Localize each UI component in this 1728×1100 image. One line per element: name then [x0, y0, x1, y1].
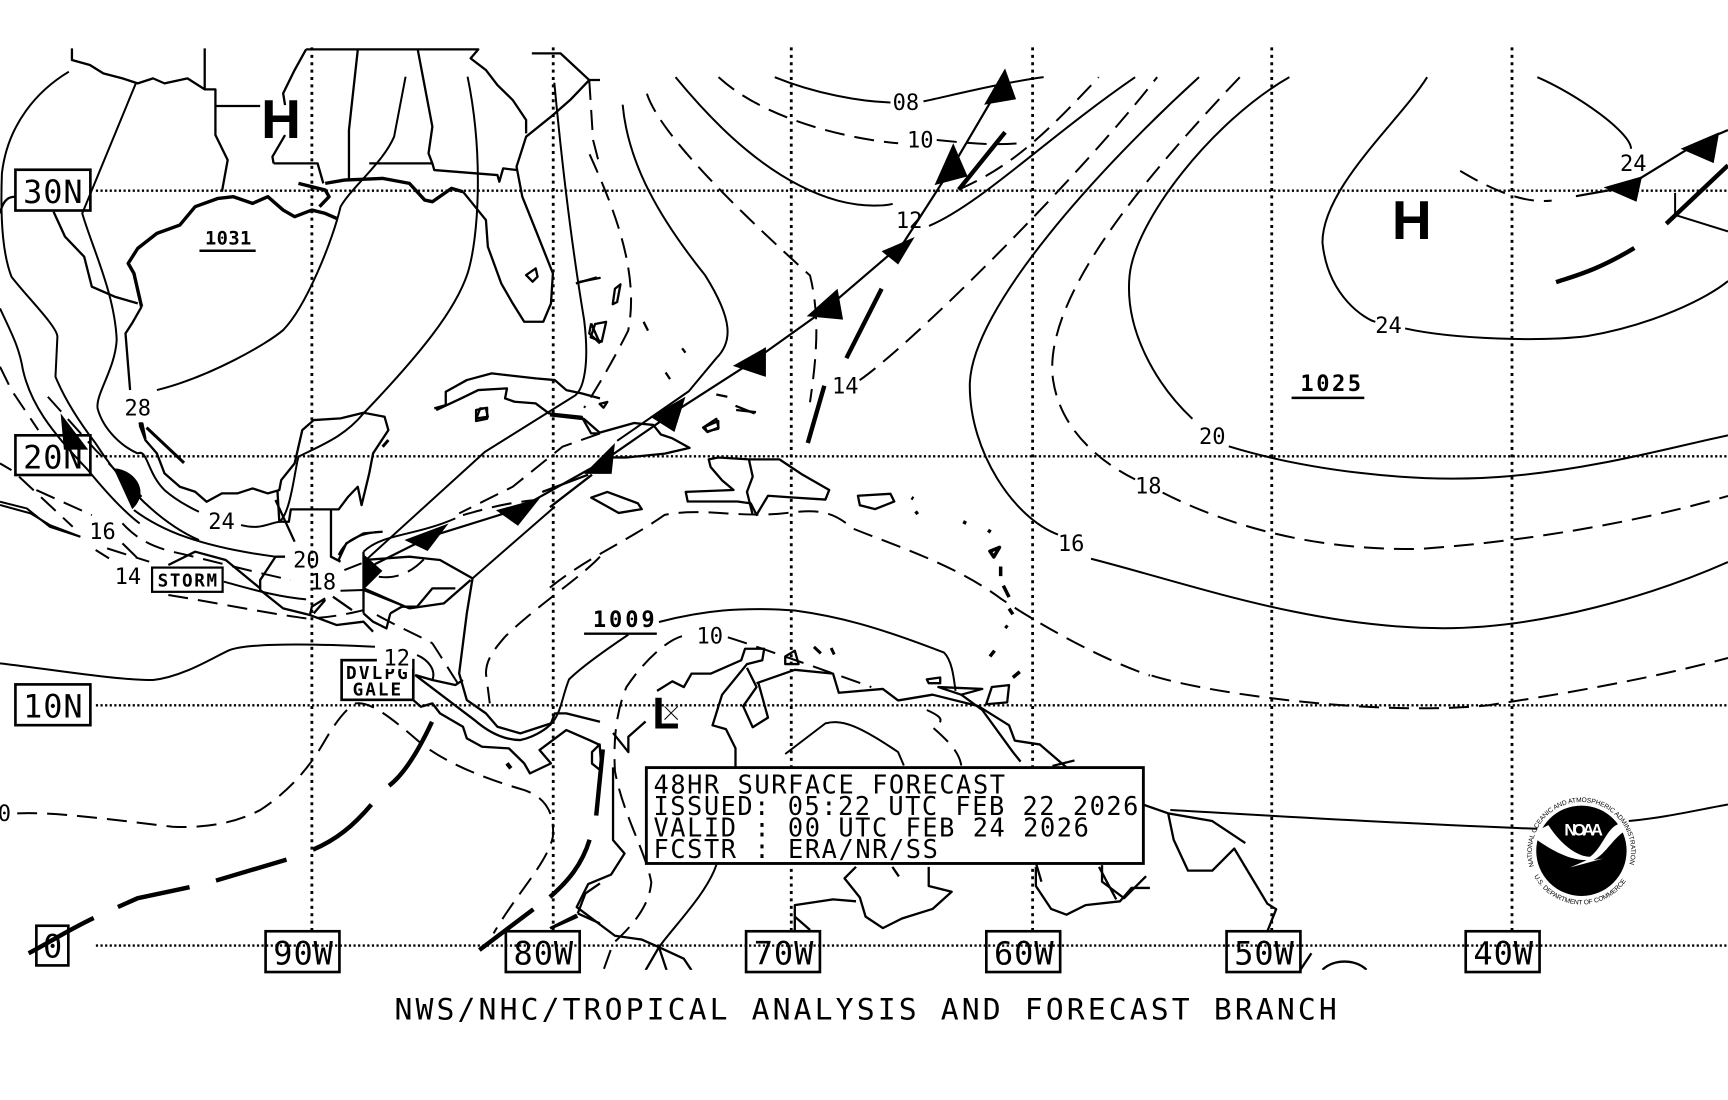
storm warning label [152, 568, 223, 592]
NOAA logo: NATIONAL OCEANIC AND ATMOSPHERIC ADMINISTRATION [1527, 797, 1636, 867]
isobar value labels: 10 [696, 625, 723, 650]
latitude label: 30N: 30N [23, 173, 83, 211]
isobars: Caribbean [550, 609, 956, 947]
isobars: dashed Central America [17, 500, 600, 933]
isobar value labels: 16 [89, 520, 116, 545]
isobars: dashed Caribbean [550, 511, 1150, 970]
isobar value labels: 18 [1135, 475, 1162, 500]
isobars: Atlantic dashed [584, 77, 1728, 708]
low pressure marker: L [652, 689, 679, 738]
coastlines and borders: Gulf of Mexico [0, 48, 600, 522]
isobars: Atlantic solid [364, 77, 1728, 829]
isobar value labels: 20 [293, 549, 320, 574]
longitude label: 90W: 90W [273, 934, 334, 972]
pressure center: 1025: 1025 [1300, 372, 1361, 397]
isobar value labels: 08 [893, 91, 919, 116]
isobar value labels: 10 [907, 129, 933, 154]
isobar value labels: 16 [1058, 532, 1084, 557]
coastlines and borders: Caribbean and South America [542, 402, 1150, 970]
latitude label: 0 [36, 926, 68, 966]
isobar value labels: 28 [124, 396, 151, 421]
small islands: Bahamas and Turks [476, 278, 756, 432]
developing gale label: GALE [353, 680, 401, 700]
isobars: dashed Gulf of Mexico [0, 80, 600, 527]
cold front [61, 68, 1728, 590]
NOAA logo [1527, 797, 1636, 904]
latitude and longitude grid [96, 47, 1728, 946]
forecast info box: ISSUED: 05:22 UTC FEB 22 2026 [654, 791, 1138, 821]
isobar value labels: 14 [115, 565, 141, 590]
isobar value labels: 18 [310, 571, 336, 596]
footer credit: NWS/NHC/TROPICAL ANALYSIS AND FORECAST BRANCH [395, 992, 1337, 1027]
isobar value labels: 24 [208, 510, 235, 535]
NOAA logo: NOAA [1564, 820, 1603, 839]
forecast info box: VALID : 00 UTC FEB 24 2026 [654, 812, 1089, 842]
isobars: Central America [0, 505, 555, 680]
longitude label: 50W: 50W [1234, 934, 1295, 972]
longitude label: 70W: 70W [754, 934, 814, 972]
isobar value labels [0, 91, 1646, 827]
longitude label: 80W: 80W [514, 934, 574, 972]
longitude label: 40W: 40W [1473, 934, 1534, 972]
NOAA logo: U.S. DEPARTMENT OF COMMERCE [1534, 874, 1626, 904]
pressure center: 1009: 1009 [593, 608, 655, 633]
developing gale label: DVLPG [346, 664, 408, 684]
forecast info box [646, 768, 1143, 864]
developing gale label: 12 [383, 647, 410, 672]
isobar value labels: 12 [896, 209, 922, 234]
isobar value labels: 24 [1620, 152, 1646, 177]
latitude label: 20N: 20N [23, 438, 83, 476]
isobars: Gulf of Mexico [0, 72, 478, 540]
high pressure marker: Gulf states: H [261, 88, 301, 150]
pressure center: 1031: 1031 [205, 229, 251, 250]
longitude label: 60W: 60W [994, 934, 1054, 972]
coastlines and borders: Central America [168, 500, 600, 928]
troughs: thick dashed lines [29, 132, 1728, 953]
isobar value labels: 24 [1375, 314, 1402, 339]
high pressure marker: Atlantic: H [1392, 189, 1432, 251]
developing gale label [342, 646, 413, 700]
forecast info box: 48HR SURFACE FORECAST [654, 769, 1005, 799]
latitude label: 10N: 10N [23, 687, 83, 725]
latitude label: 0: 0 [43, 928, 62, 966]
coastlines: eastern South America [1036, 760, 1367, 970]
isobar value labels: 20 [1199, 425, 1226, 450]
storm warning label: STORM [158, 571, 217, 591]
isobar value labels: 14 [832, 374, 859, 399]
forecast info box: FCSTR : ERA/NR/SS [654, 834, 938, 864]
